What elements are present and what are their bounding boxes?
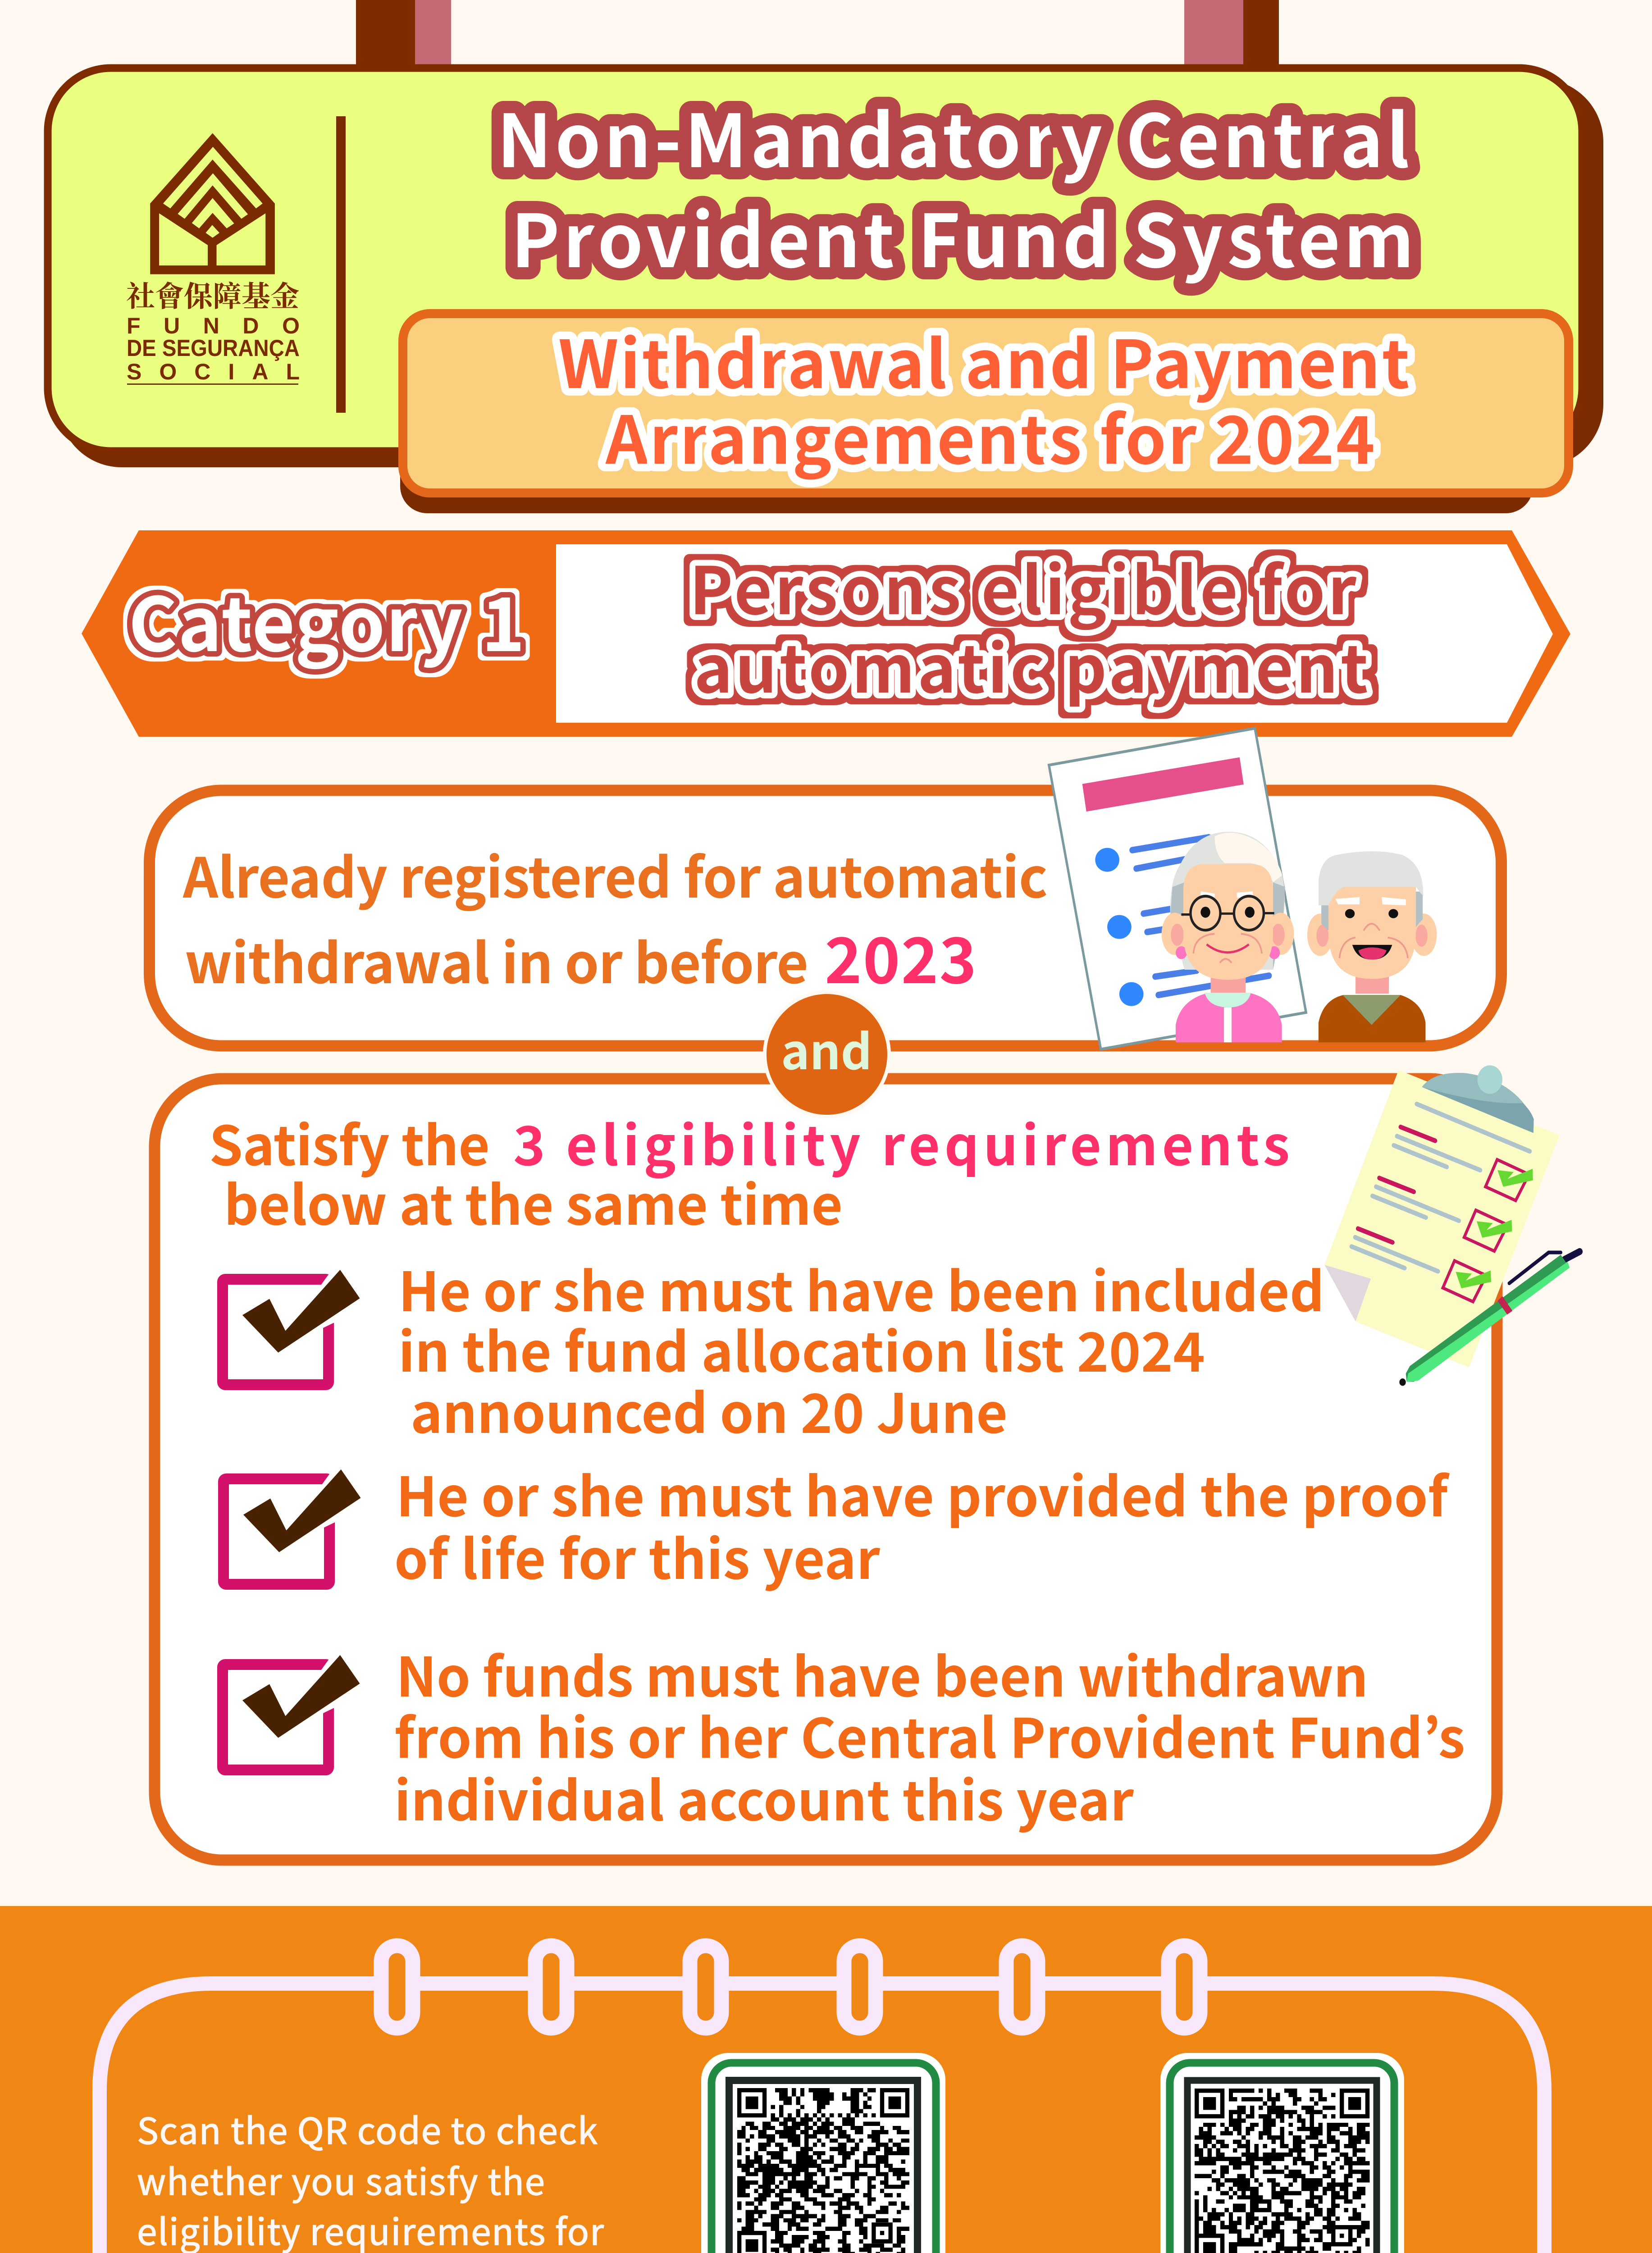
icon: checkbox 2 — [224, 1468, 362, 1584]
icon: Social Security Fund logo — [126, 133, 300, 385]
logo divider — [336, 116, 346, 413]
and connector — [765, 992, 889, 1117]
title — [497, 82, 1414, 288]
requirements heading: Satisfy the — [209, 1103, 490, 1181]
header panel shadow — [59, 79, 1603, 467]
illustration: document and elderly couple — [1049, 728, 1437, 1049]
logo Portuguese name — [127, 313, 300, 385]
pen — [1399, 1252, 1579, 1386]
requirement 1 text: He or she must have been included — [398, 1249, 1324, 1327]
logo Chinese name: 社會保障基金 — [126, 274, 299, 315]
category heading: automatic payment — [694, 617, 1368, 711]
paper fold — [1324, 1265, 1371, 1322]
registration text — [183, 834, 1048, 1002]
panel: footer — [0, 1906, 1652, 2253]
header panel face — [48, 68, 1582, 451]
grandfather — [1307, 851, 1437, 1042]
requirement 3 text: individual account this year — [394, 1758, 1134, 1836]
logo mark — [150, 133, 275, 274]
category heading: Persons eligible for — [689, 538, 1357, 633]
hanging straps — [356, 0, 1279, 68]
subtitle panel — [403, 312, 1569, 493]
icon: checkbox 1 — [223, 1268, 361, 1385]
scan instruction text — [137, 2102, 604, 2253]
requirement 3 text — [394, 1634, 1465, 1836]
scan instruction text: whether you satisfy the — [137, 2153, 545, 2206]
title: Non-Mandatory Central — [497, 82, 1410, 188]
requirement 3 text: from his or her Central Provident Fund’s — [394, 1695, 1465, 1774]
subtitle text: Arrangements for 2024 — [605, 388, 1375, 483]
requirement 2 text — [394, 1454, 1450, 1595]
checklist ticks — [1443, 1159, 1533, 1302]
requirement 2 text: of life for this year — [394, 1516, 881, 1595]
clipboard clip — [1422, 1065, 1534, 1133]
QR code: Social Security Fund website — [701, 2053, 945, 2253]
panel: category banner — [82, 530, 1570, 737]
checklist lines — [1351, 1104, 1530, 1271]
requirement 2 text: He or she must have provided the proof — [396, 1454, 1450, 1532]
QR code: Macao One Account — [1160, 2053, 1404, 2253]
icon: checkbox 3 — [223, 1653, 361, 1770]
notebook outline — [92, 1976, 1552, 2253]
panel: registered for automatic withdrawal — [150, 790, 1501, 1046]
and connector: and — [781, 1013, 872, 1084]
panel: header — [48, 68, 1603, 513]
requirement 1 text: in the fund allocation list 2024 — [398, 1309, 1205, 1387]
category heading — [689, 538, 1368, 711]
category label: Category 1 — [128, 565, 525, 673]
banner white area — [556, 544, 1553, 723]
illustration: clipboard and pen — [1324, 1065, 1579, 1386]
clipboard paper — [1324, 1070, 1560, 1368]
scan instruction text: Scan the QR code to check — [137, 2102, 598, 2155]
grandmother — [1162, 832, 1294, 1042]
requirement 1 text: announced on 20 June — [411, 1370, 1008, 1449]
registration text: 2023 — [825, 911, 977, 1002]
registration text: Already registered for automatic — [183, 834, 1048, 914]
requirements heading — [209, 1103, 1290, 1241]
panel: eligibility requirements — [155, 1079, 1497, 1860]
registration text: withdrawal in or before — [185, 920, 808, 999]
subtitle panel shadow — [400, 360, 1533, 513]
subtitle text — [558, 312, 1410, 483]
requirements heading: below at the same time — [224, 1162, 843, 1241]
notebook rings — [381, 1946, 1200, 2028]
logo Portuguese name: DE SEGURANÇA — [127, 335, 300, 361]
logo Portuguese name: SOCIAL — [127, 359, 300, 384]
document — [1049, 728, 1306, 1049]
requirements heading: 3 eligibility requirements — [513, 1103, 1290, 1181]
footer background — [0, 1906, 1652, 2253]
logo Portuguese name: FUNDO — [127, 313, 300, 338]
subtitle text: Withdrawal and Payment — [558, 312, 1410, 407]
requirement 1 text — [398, 1249, 1324, 1449]
title: Provident Fund System — [511, 182, 1414, 288]
banner shape — [82, 530, 1570, 737]
requirement 3 text: No funds must have been withdrawn — [396, 1634, 1368, 1712]
